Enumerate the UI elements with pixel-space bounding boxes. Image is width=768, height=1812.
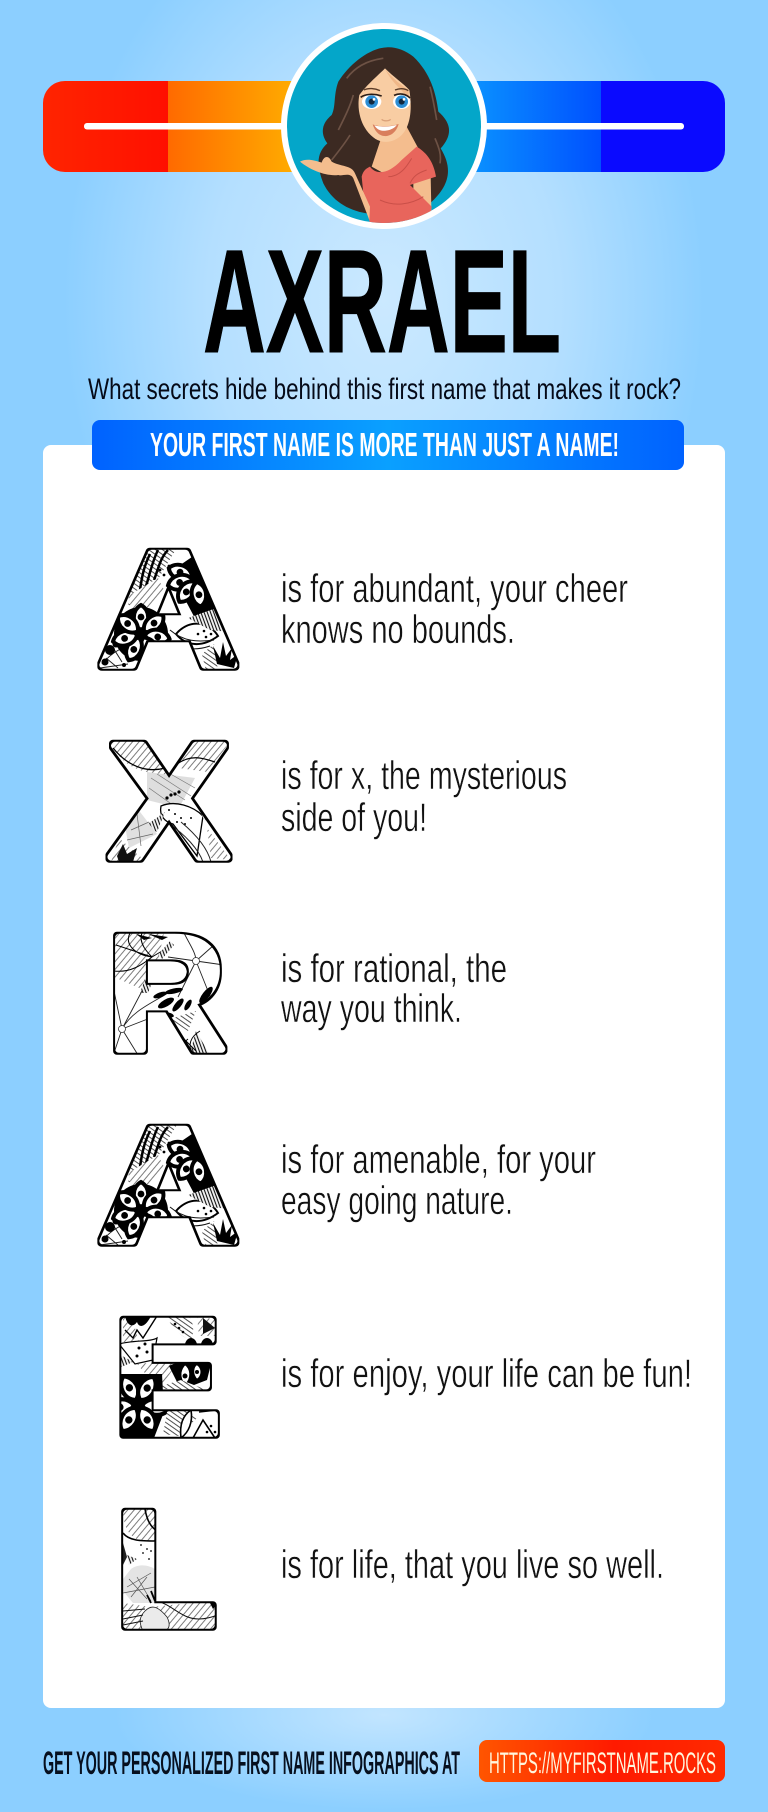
text: rational: [280, 947, 507, 1031]
footer url button: [479, 1740, 725, 1782]
text: amenable: [281, 1138, 596, 1223]
decorative letter E: E: [114, 1287, 220, 1468]
text: abundant: [281, 567, 628, 652]
nose: [382, 119, 391, 121]
letter A: amenable: [99, 1095, 596, 1276]
letter A: abundant: [99, 519, 628, 700]
decorative letter A: A: [99, 1095, 238, 1276]
text: x: [281, 754, 567, 840]
text: x: side of you!: [281, 796, 427, 840]
text: rational: way you think.: [280, 987, 462, 1031]
header gradient bar: [43, 81, 725, 172]
text: amenable: easy going nature.: [281, 1179, 513, 1223]
letter E: enjoy: [114, 1287, 692, 1468]
text: x: is for x, the mysterious: [281, 754, 567, 798]
letter R: rational: [108, 903, 507, 1084]
eyes and brows: [362, 94, 381, 109]
text: amenable: is for amenable, for your: [281, 1138, 596, 1182]
letter L: life: [116, 1479, 664, 1660]
text: abundant: is for abundant, your cheer: [281, 567, 628, 611]
decorative letter A: A: [99, 519, 238, 700]
neck and right arm: [372, 127, 418, 175]
text: rational: is for rational, the: [281, 947, 507, 991]
letter X: x: [110, 711, 567, 892]
shirt: [362, 147, 436, 223]
hair: [319, 47, 449, 213]
avatar: cartoon woman in circle: [281, 23, 487, 229]
decorative letter R: R: [108, 903, 225, 1084]
face: [359, 68, 411, 142]
left arm and hand: [300, 157, 370, 220]
white content panel: [43, 445, 725, 1708]
decorative letter L: L: [116, 1479, 216, 1660]
banner: [92, 420, 684, 470]
text: abundant: knows no bounds.: [281, 608, 515, 652]
decorative letter X: X: [110, 711, 228, 892]
smile: [373, 124, 399, 136]
